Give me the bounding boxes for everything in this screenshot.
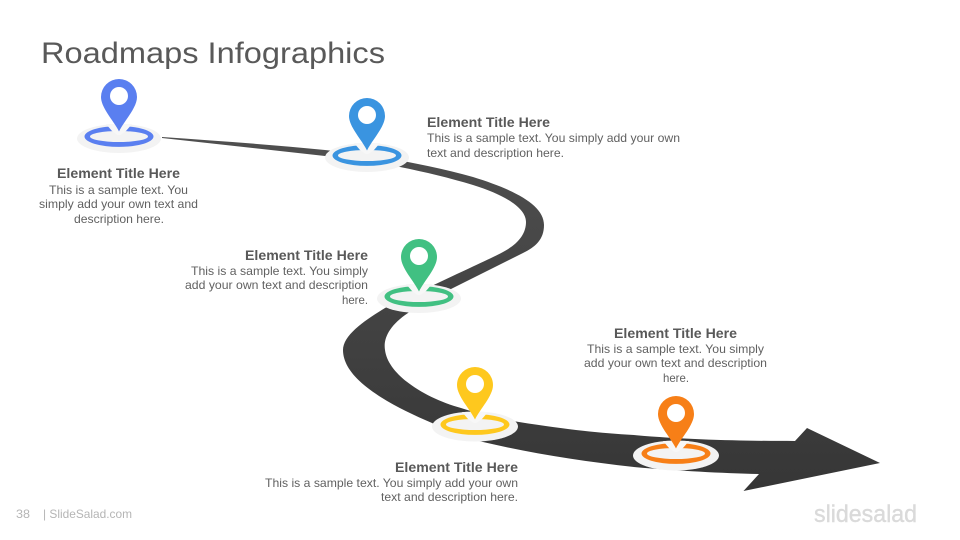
marker 3: green pin — [377, 239, 461, 313]
text block 1: Element Title Here — [57, 165, 180, 181]
text block 1 — [39, 165, 198, 226]
title: Roadmaps Infographics — [41, 37, 385, 70]
text block 4 — [265, 459, 518, 504]
text block 5: here. — [663, 371, 689, 385]
text block 5 — [584, 325, 767, 385]
marker 5: orange pin — [633, 396, 719, 470]
text block 5: add your own text and description — [584, 356, 767, 370]
text block 3: Element Title Here — [245, 247, 368, 263]
marker 2: sky blue pin — [325, 98, 409, 172]
text block 2: text and description here. — [427, 146, 564, 160]
road arrow — [162, 137, 880, 491]
text block 3: This is a sample text. You simply — [191, 264, 368, 278]
text block 1: description here. — [74, 212, 164, 226]
text block 3 — [185, 247, 368, 307]
footer source: | SlideSalad.com — [43, 507, 132, 521]
text block 4: Element Title Here — [395, 459, 518, 475]
text block 1: simply add your own text and — [39, 197, 198, 211]
marker 1: blue pin — [77, 79, 161, 153]
marker 4: yellow pin — [432, 367, 518, 442]
text block 4: text and description here. — [381, 490, 518, 504]
text block 1: This is a sample text. You — [49, 183, 188, 197]
logo: slidesalad: slidesalad — [814, 501, 917, 528]
text block 3: add your own text and description — [185, 278, 368, 292]
text block 5: This is a sample text. You simply — [587, 342, 764, 356]
text block 4: This is a sample text. You simply add your own — [265, 476, 518, 490]
page number: 38 — [16, 507, 30, 521]
text block 3: here. — [342, 293, 368, 307]
text block 2 — [427, 114, 680, 160]
text block 2: This is a sample text. You simply add your own — [427, 131, 680, 145]
text block 2: Element Title Here — [427, 114, 550, 130]
text block 5: Element Title Here — [614, 325, 737, 341]
